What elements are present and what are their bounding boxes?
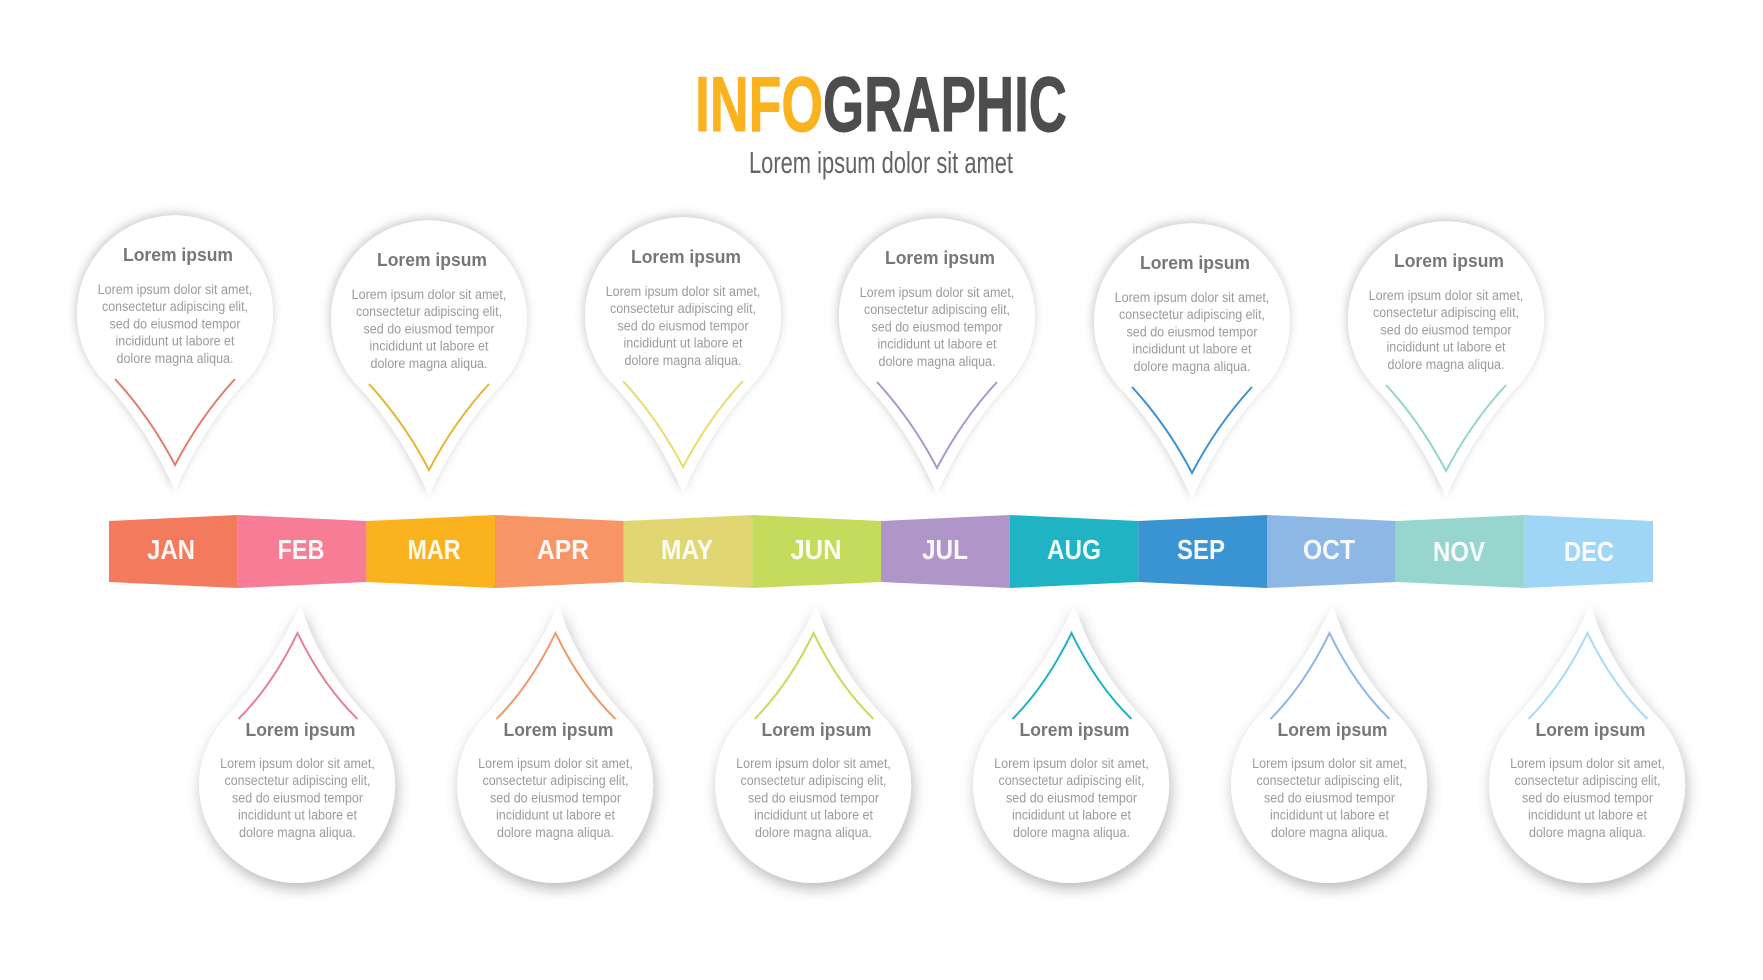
pin: January: Lorem ipsum dolor sit amet, <box>98 282 252 297</box>
pin: November: dolore magna aliqua. <box>1388 357 1504 372</box>
drop: April <box>457 605 653 883</box>
drop: December: Lorem ipsum <box>1536 719 1646 740</box>
title <box>695 60 1067 148</box>
pin: July: dolore magna aliqua. <box>878 354 996 369</box>
drop: October: sed do eiusmod tempor <box>1264 790 1396 805</box>
drop: April: dolore magna aliqua. <box>497 825 614 840</box>
drop: December: consectetur adipiscing elit, <box>1514 773 1660 788</box>
segment: FEB <box>238 515 366 588</box>
drop: December: incididunt ut labore et <box>1528 808 1647 823</box>
segment: MAY: MAY <box>661 534 713 565</box>
drop: February: incididunt ut labore et <box>238 808 357 823</box>
drop: October: consectetur adipiscing elit, <box>1256 773 1402 788</box>
segment: OCT <box>1267 515 1396 588</box>
drop: June: incididunt ut labore et <box>754 808 873 823</box>
drop: April: Lorem ipsum dolor sit amet, <box>478 756 633 771</box>
pin: September: sed do eiusmod tempor <box>1126 324 1258 339</box>
pin: May: consectetur adipiscing elit, <box>610 301 756 316</box>
drop: August: Lorem ipsum <box>1020 719 1130 740</box>
drop: October: dolore magna aliqua. <box>1271 825 1388 840</box>
pin: May: incididunt ut labore et <box>624 336 743 351</box>
segment: JUN <box>752 515 881 588</box>
pin: September <box>1094 223 1290 499</box>
segment: APR: APR <box>537 534 589 565</box>
pin: January: dolore magna aliqua. <box>116 351 234 366</box>
pin: September: dolore magna aliqua. <box>1134 359 1250 374</box>
drop: June: consectetur adipiscing elit, <box>740 773 886 788</box>
subtitle: Lorem ipsum dolor sit amet <box>749 145 1013 180</box>
pin: March: consectetur adipiscing elit, <box>356 304 502 319</box>
drop: February: Lorem ipsum <box>246 719 356 740</box>
drop: February <box>199 605 395 883</box>
drop: June <box>715 605 911 883</box>
segment: MAR: MAR <box>408 534 460 565</box>
drop: October: Lorem ipsum <box>1278 719 1388 740</box>
drop: June: sed do eiusmod tempor <box>748 790 880 805</box>
pin: May: dolore magna aliqua. <box>624 353 742 368</box>
drop: February: consectetur adipiscing elit, <box>224 773 370 788</box>
pin: July: Lorem ipsum <box>885 247 995 268</box>
pin: July <box>839 218 1035 494</box>
segment: SEP: SEP <box>1177 534 1225 565</box>
pin: July: sed do eiusmod tempor <box>872 319 1003 334</box>
drop: February: dolore magna aliqua. <box>239 825 356 840</box>
segment: DEC: DEC <box>1564 536 1614 567</box>
pin: January: consectetur adipiscing elit, <box>102 299 248 314</box>
drop: June: dolore magna aliqua. <box>755 825 872 840</box>
segment: AUG: AUG <box>1047 534 1101 565</box>
pin: January: sed do eiusmod tempor <box>110 316 241 331</box>
segment: JUL <box>881 515 1010 588</box>
timeline band <box>109 515 1653 588</box>
segment: JAN: JAN <box>147 534 195 565</box>
pin: November: consectetur adipiscing elit, <box>1373 305 1519 320</box>
pin: May: Lorem ipsum dolor sit amet, <box>606 284 760 299</box>
pin: January <box>77 215 273 491</box>
drop: December: dolore magna aliqua. <box>1529 825 1646 840</box>
drop: April: incididunt ut labore et <box>496 808 615 823</box>
segment: JAN <box>109 515 238 588</box>
drop: August: dolore magna aliqua. <box>1013 825 1130 840</box>
pin: May <box>585 217 781 493</box>
segment: NOV: NOV <box>1433 536 1485 567</box>
drop: February: Lorem ipsum dolor sit amet, <box>220 756 375 771</box>
title: INFO <box>695 60 823 148</box>
pin: March: Lorem ipsum dolor sit amet, <box>352 287 506 302</box>
drop: June: Lorem ipsum <box>762 719 872 740</box>
drop: June: Lorem ipsum dolor sit amet, <box>736 756 891 771</box>
segment: SEP <box>1138 515 1267 588</box>
pin: July: incididunt ut labore et <box>878 337 997 352</box>
pin: May: sed do eiusmod tempor <box>618 318 749 333</box>
segment: AUG <box>1010 515 1138 588</box>
pin: September: Lorem ipsum <box>1140 252 1250 273</box>
drop: August: consectetur adipiscing elit, <box>998 773 1144 788</box>
drop: August: incididunt ut labore et <box>1012 808 1131 823</box>
pin: November: incididunt ut labore et <box>1386 340 1506 355</box>
drop: April: consectetur adipiscing elit, <box>482 773 628 788</box>
drop: April: sed do eiusmod tempor <box>490 790 622 805</box>
segment: MAR <box>366 515 495 588</box>
drop: December: Lorem ipsum dolor sit amet, <box>1510 756 1665 771</box>
segment: MAY <box>624 515 752 588</box>
segment: JUN: JUN <box>790 534 842 565</box>
pin: September: Lorem ipsum dolor sit amet, <box>1115 290 1269 305</box>
pin: March: sed do eiusmod tempor <box>364 321 495 336</box>
pin: November: Lorem ipsum <box>1394 250 1504 271</box>
pin: March: dolore magna aliqua. <box>370 356 488 371</box>
pin: January: Lorem ipsum <box>123 244 233 265</box>
drop: February: sed do eiusmod tempor <box>232 790 364 805</box>
pin: May: Lorem ipsum <box>631 246 741 267</box>
pin: September: consectetur adipiscing elit, <box>1119 307 1265 322</box>
drop: October: incididunt ut labore et <box>1270 808 1389 823</box>
segment: APR <box>495 515 624 588</box>
drop: December <box>1489 605 1685 883</box>
pin: November: sed do eiusmod tempor <box>1380 322 1512 337</box>
pin: March: incididunt ut labore et <box>370 339 489 354</box>
segment: JUL: JUL <box>922 534 968 565</box>
pin: July: Lorem ipsum dolor sit amet, <box>860 285 1014 300</box>
pin: November: Lorem ipsum dolor sit amet, <box>1369 288 1523 303</box>
drop: August <box>973 605 1169 883</box>
pin: March: Lorem ipsum <box>377 249 487 270</box>
segment: DEC <box>1524 515 1653 588</box>
pin: March <box>331 220 527 496</box>
drop: December: sed do eiusmod tempor <box>1522 790 1654 805</box>
segment: NOV <box>1396 515 1524 588</box>
drop: August: Lorem ipsum dolor sit amet, <box>994 756 1149 771</box>
drop: October: Lorem ipsum dolor sit amet, <box>1252 756 1407 771</box>
pin: January: incididunt ut labore et <box>116 334 235 349</box>
segment: OCT: OCT <box>1303 534 1355 565</box>
pin: September: incididunt ut labore et <box>1132 342 1252 357</box>
drop: October <box>1231 605 1427 883</box>
segment: FEB: FEB <box>278 534 324 565</box>
pin: July: consectetur adipiscing elit, <box>864 302 1010 317</box>
drop: August: sed do eiusmod tempor <box>1006 790 1138 805</box>
drop: April: Lorem ipsum <box>504 719 614 740</box>
title: GRAPHIC <box>823 60 1067 148</box>
pin: November <box>1348 221 1544 497</box>
